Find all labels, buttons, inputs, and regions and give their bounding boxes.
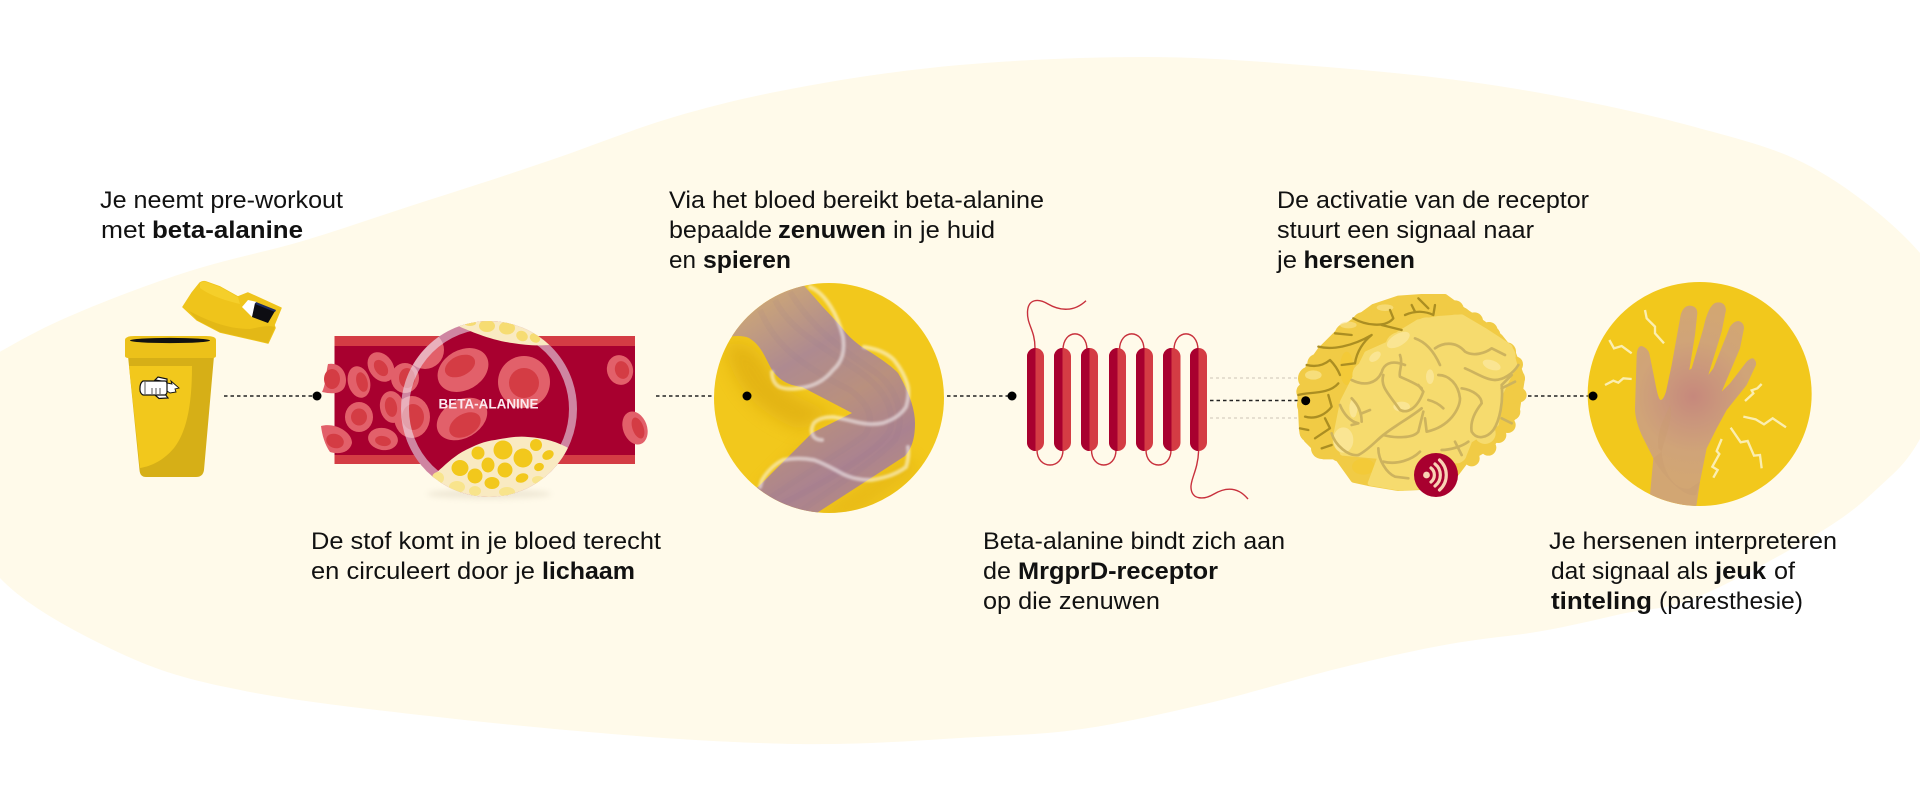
text: step 5: je (1276, 247, 1297, 274)
icon: signal badge (1414, 453, 1458, 497)
enlarged blood cells (413, 337, 550, 440)
red blood cells (321, 347, 652, 453)
text: step 6: tinteling (1551, 588, 1652, 615)
muscle streaks (760, 292, 900, 515)
text: step 5: De activatie van de receptor (1277, 187, 1589, 214)
text: step 1 (100, 187, 343, 244)
connector 1 (224, 392, 322, 400)
label: BETA-ALANINE: BETA-ALANINE (438, 396, 538, 412)
text: step 1: beta-alanine (152, 217, 303, 244)
illustration: tingling hand (1588, 282, 1812, 508)
brain back lobe (1296, 295, 1527, 488)
arm shape (725, 280, 915, 520)
lid shading (189, 311, 275, 343)
text: step 4: de (983, 558, 1011, 585)
text: step 6 (1549, 528, 1837, 615)
connector 5 (1528, 395, 1593, 397)
connector 4 (1210, 378, 1306, 418)
text: step 2: De stof komt in je bloed terecht (311, 528, 661, 555)
magnifier: close-up of vessel (321, 318, 652, 510)
brain deep-yellow gaps (1340, 335, 1482, 475)
text: step 5: hersenen (1304, 247, 1415, 274)
text: step 4 (983, 528, 1285, 615)
illustration: brain (1296, 295, 1527, 497)
hand shape (1635, 302, 1756, 508)
text: step 3: in je huid (893, 217, 995, 244)
transmembrane helices (1027, 348, 1207, 451)
cup highlight panel (129, 366, 192, 468)
illustration: muscle and nerves (714, 280, 944, 520)
text: step 3: bepaalde (669, 217, 772, 244)
text: step 3: en (669, 247, 696, 274)
text: step 4: Beta-alanine bindt zich aan (983, 528, 1285, 555)
text: step 2: lichaam (542, 558, 635, 585)
cup opening (130, 338, 210, 343)
cup body (128, 356, 214, 477)
illustration: MrgprD receptor (1027, 300, 1248, 499)
tingling bolts (1605, 310, 1786, 478)
text: step 1: Je neemt pre-workout (100, 187, 343, 214)
text: step 3: Via het bloed bereikt beta-alanine (669, 187, 1044, 214)
text: step 5 (1276, 187, 1589, 274)
lid spout (242, 300, 257, 317)
text: step 6: (paresthesie) (1659, 588, 1803, 615)
top tissue (459, 321, 550, 346)
nerve fibres (760, 287, 908, 487)
icon: shaker lid (183, 282, 281, 343)
shadow on yellow (725, 343, 835, 430)
text: step 3 (669, 187, 1044, 274)
brain highlights (1305, 304, 1502, 453)
text: step 3: zenuwen (778, 217, 886, 244)
text: step 1: met (101, 217, 145, 244)
brain front lobe (1333, 315, 1516, 491)
text: step 2: en circuleert door je (311, 558, 535, 585)
brain pointer dot (1301, 396, 1310, 405)
text: step 2 (311, 528, 661, 585)
lens ring (405, 325, 573, 493)
text: step 4: op die zenuwen (983, 588, 1160, 615)
hand pointer dot (1588, 392, 1598, 400)
connector 3 (742, 392, 1016, 400)
icon: shaker cup (125, 336, 216, 477)
text: step 6: dat signaal als (1551, 558, 1708, 585)
brain folds: back lobe (1298, 298, 1435, 448)
icon: rocket logo (140, 377, 179, 398)
illustration: blood vessel (334, 336, 635, 464)
text: step 3: spieren (703, 247, 791, 274)
text: step 4: MrgprD-receptor (1018, 558, 1218, 585)
palm and wrist tone (1653, 405, 1700, 495)
text: step 5: stuurt een signaal naar (1277, 217, 1534, 244)
text: step 6: Je hersenen interpreteren (1549, 528, 1837, 555)
bottom tissue (434, 436, 568, 497)
text: step 6: jeuk (1714, 558, 1767, 585)
connector 2 (656, 395, 747, 397)
brain folds: front lobe (1332, 338, 1518, 478)
receptor loops (1027, 300, 1248, 499)
lid highlight (200, 282, 240, 304)
cup rim (125, 336, 216, 358)
text: step 6: of (1774, 558, 1795, 585)
